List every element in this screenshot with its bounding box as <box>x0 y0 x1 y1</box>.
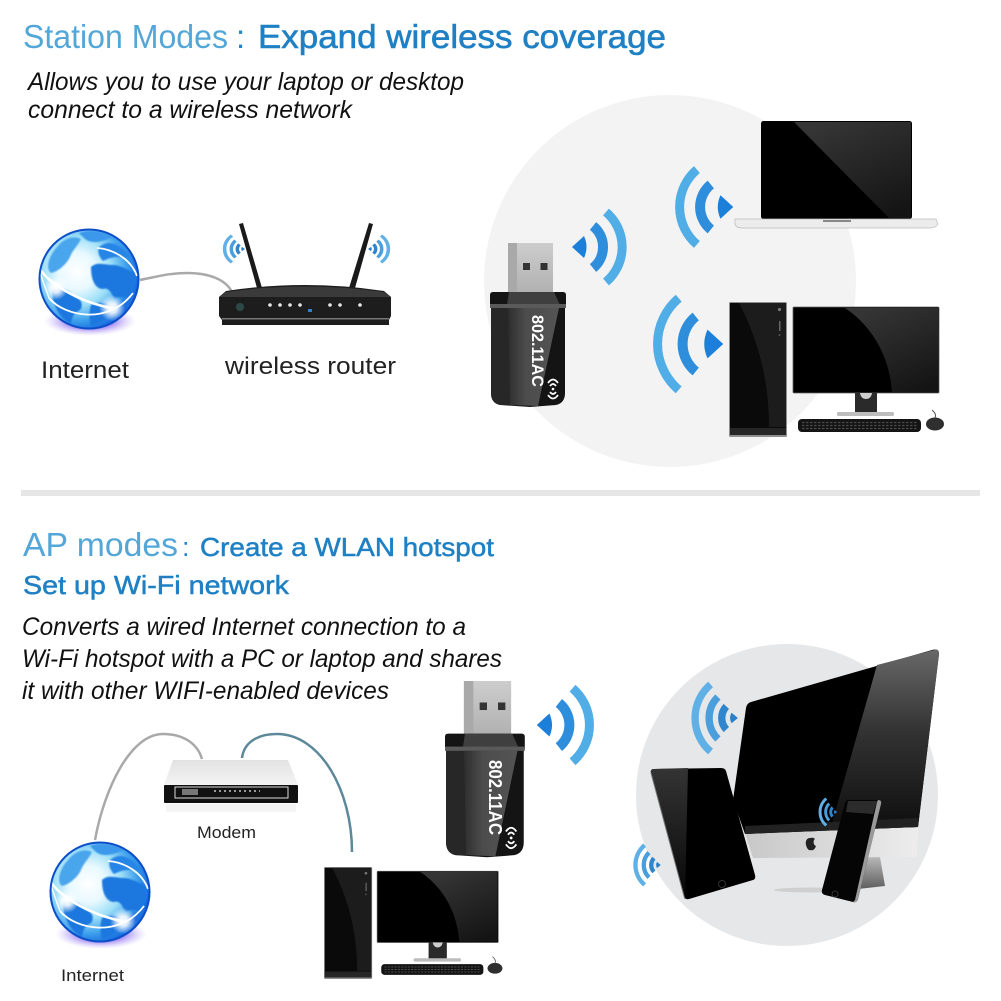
cable: modem to computer <box>242 734 352 852</box>
usb wifi adapter <box>490 243 566 407</box>
icon: wifi on monitor <box>820 799 837 825</box>
icon: tablet <box>651 768 755 899</box>
ap mode description: Wi-Fi hotspot with a PC or laptop and shares <box>22 645 502 673</box>
station mode description <box>26 68 464 124</box>
ap mode description: it with other WIFI-enabled devices <box>22 677 389 705</box>
icon: all-in-one monitor <box>733 650 939 892</box>
icon: wifi from adapter <box>572 212 622 282</box>
station mode title: Station Modes <box>23 18 228 55</box>
divider <box>21 490 980 496</box>
usb wifi adapter <box>445 681 525 857</box>
label: modem: Modem <box>197 823 256 842</box>
label: internet: Internet <box>41 357 129 384</box>
cable: globe to router <box>140 273 232 292</box>
icon: phone <box>822 800 881 902</box>
ap mode title: Set up Wi-Fi network <box>23 570 290 600</box>
icon: wifi near tablet <box>635 845 661 885</box>
icon: router wifi right <box>368 236 388 262</box>
station mode title: Expand wireless coverage <box>258 18 666 55</box>
icon: internet globe <box>50 842 150 949</box>
station mode description: connect to a wireless network <box>28 96 353 124</box>
icon: laptop <box>735 121 938 228</box>
icon: wireless router <box>219 223 391 325</box>
ap mode title <box>23 526 495 600</box>
label: wireless router: wireless router <box>224 353 396 380</box>
station mode title <box>23 18 666 55</box>
cable: globe to modem <box>95 734 202 840</box>
usb wifi adapter: 802.11AC <box>485 760 505 835</box>
ap mode description: Converts a wired Internet connection to a <box>22 613 466 641</box>
ap mode title: : <box>182 532 190 562</box>
icon: desktop computer <box>729 302 944 437</box>
icon: wifi on circle <box>695 684 738 752</box>
background circle: hotspot devices <box>636 644 938 946</box>
usb wifi adapter: 802.11AC <box>528 315 547 387</box>
ap mode description <box>22 613 502 705</box>
station mode title: : <box>236 18 245 55</box>
icon: router wifi left <box>225 236 245 262</box>
icon: wifi to desktop <box>658 298 723 390</box>
ap mode title: AP modes <box>23 526 178 563</box>
ap mode title: Create a WLAN hotspot <box>200 532 495 562</box>
icon: desktop computer <box>324 867 502 979</box>
icon: modem <box>164 760 298 812</box>
icon: wifi from adapter <box>537 688 589 762</box>
label: internet: Internet <box>61 966 124 985</box>
icon: wifi to laptop <box>680 170 733 244</box>
station mode description: Allows you to use your laptop or desktop <box>26 68 464 96</box>
background circle: station devices <box>484 95 856 467</box>
icon: internet globe <box>39 229 139 336</box>
